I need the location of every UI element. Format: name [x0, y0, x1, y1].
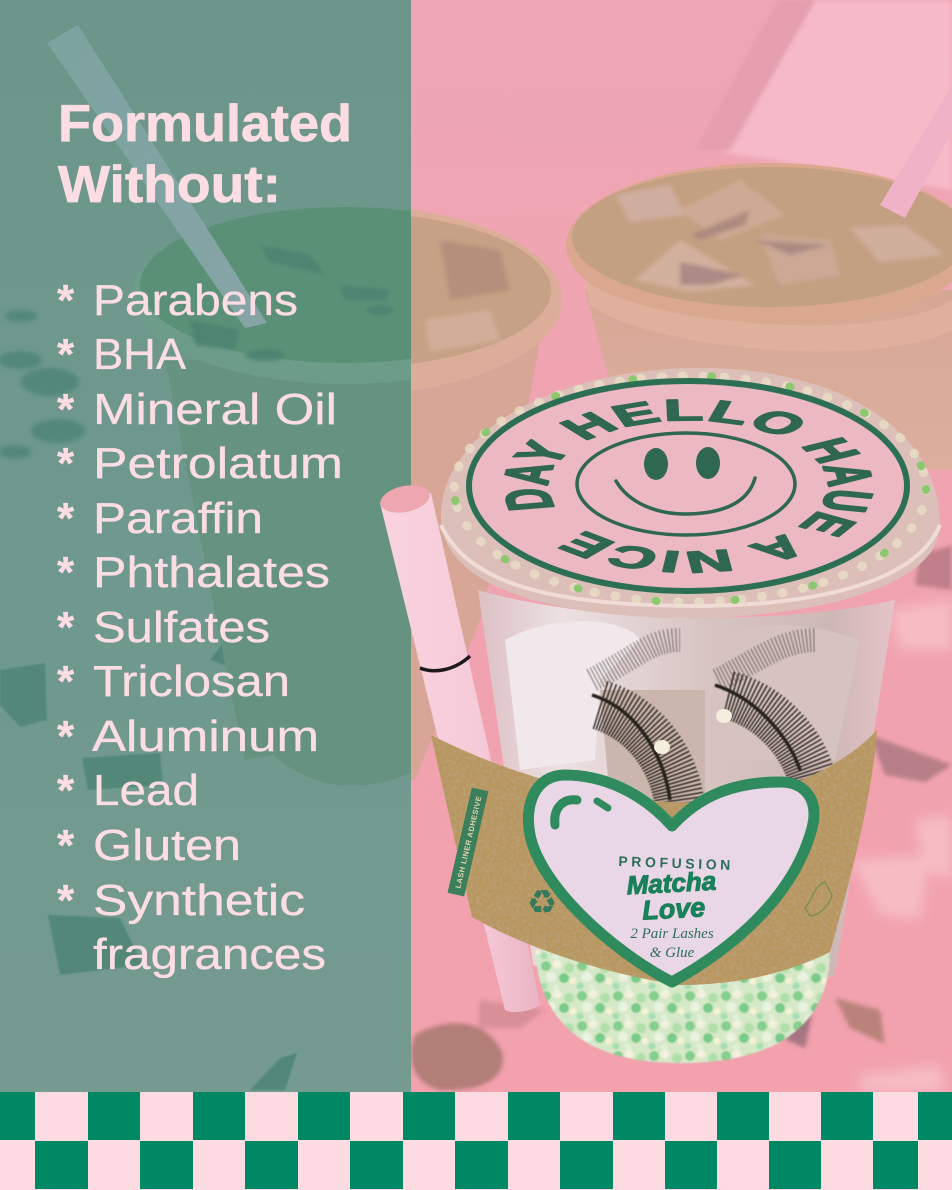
pen end cap [378, 481, 432, 517]
light wall patch [722, 0, 952, 190]
lid glitter dots cream [454, 376, 926, 602]
item: lead [57, 766, 199, 815]
panel: translucent teal overlay [0, 0, 411, 1092]
item: gluten: Gluten [93, 821, 241, 870]
item: BHA: * [57, 330, 75, 379]
right cup body [585, 290, 952, 470]
item: parabens: * [57, 276, 75, 325]
item: petrolatum: Petrolatum [93, 439, 343, 488]
panel scene: drink streaks [190, 245, 394, 361]
item: lead: * [57, 766, 75, 815]
smiley ring [577, 433, 795, 535]
item: sulfates: * [57, 603, 75, 652]
item: sulfates: Sulfates [93, 603, 270, 652]
pink straw [880, 85, 952, 218]
panel scene: blurred drops [0, 310, 85, 459]
left cup body [400, 340, 540, 780]
sleeve side tag: LASH LINER ADHESIVE [453, 795, 484, 889]
product: clear cup with lashes [478, 590, 895, 1063]
item: synthetic fragrances: fragrances [93, 930, 326, 979]
right iced drink cup [566, 163, 952, 470]
item: paraffin: Paraffin [93, 494, 263, 543]
matcha love logo [626, 866, 718, 926]
product: kraft sleeve [431, 730, 877, 985]
panel scene: green cup body [165, 360, 411, 786]
sleeve shape [431, 730, 877, 985]
right cup lid rim band [585, 280, 952, 352]
item: paraffin: * [57, 494, 75, 543]
brand name: PROFUSION [618, 853, 734, 873]
item: synthetic fragrances [57, 876, 326, 979]
left cup lid rim [128, 205, 562, 395]
circular lid text: DAY HELLO HAUE A NICE [504, 399, 874, 574]
left iced cup, right of panel [128, 205, 562, 780]
smiley mouth [616, 478, 755, 514]
right cup ice cubes [615, 180, 945, 292]
sleeve side tag [448, 787, 488, 897]
item: gluten: * [57, 821, 75, 870]
pen barrel [380, 493, 540, 1012]
heart shine small [597, 801, 608, 808]
item: petrolatum: * [57, 439, 75, 488]
panel scene: green cup lid rim [200, 360, 411, 384]
cup inner tray [505, 621, 848, 802]
item: synthetic fragrances: Synthetic [93, 876, 305, 925]
love word: Love [641, 892, 706, 926]
item: mineral oil: * [57, 385, 75, 434]
right cup drink top [572, 167, 952, 307]
matcha word: Matcha [626, 866, 717, 900]
lid rim highlight [441, 525, 940, 606]
lid glitter dots green [454, 376, 926, 602]
item: lead: Lead [93, 766, 199, 815]
heading [58, 95, 352, 214]
pale confetti reflections on table [850, 600, 952, 1092]
left cup ice [425, 240, 510, 352]
item: triclosan: * [57, 657, 75, 706]
hand icon [805, 882, 832, 916]
smiley left eye [644, 448, 668, 480]
left lash [592, 640, 680, 815]
item: mineral oil: Mineral Oil [93, 385, 337, 434]
item: BHA: BHA [93, 330, 187, 379]
pen black ring [420, 656, 470, 671]
wall shadows and table shards [411, 0, 952, 1090]
lid label [469, 381, 907, 591]
glitter in cup base [535, 950, 830, 1063]
clear cup body [478, 590, 895, 996]
panel scene: shards [0, 640, 297, 1090]
item: triclosan: Triclosan [93, 657, 290, 706]
item: aluminum: Aluminum [92, 712, 319, 761]
item: phthalates: Phthalates [93, 548, 330, 597]
panel scene: straw [47, 25, 267, 328]
script line one: 2 Pair Lashes [630, 926, 714, 942]
right cup lid rim [566, 163, 952, 327]
smiley right eye [696, 447, 720, 479]
product: cup lid [439, 368, 942, 618]
item: aluminum: * [57, 712, 75, 761]
recycle icon: ♻ [527, 883, 557, 923]
heading: Without: [58, 156, 281, 214]
lid outer rim [441, 368, 940, 618]
product: heart label [528, 775, 814, 982]
heart shine large [555, 800, 577, 825]
heading: Formulated [58, 95, 352, 153]
checkerboard footer [0, 1092, 952, 1190]
ingredients list [57, 276, 343, 979]
item: synthetic fragrances: * [57, 876, 75, 925]
item: BHA [57, 330, 187, 379]
left cup drink top [139, 212, 551, 368]
heart shape [528, 775, 814, 982]
product: lash liner pen [378, 481, 540, 1012]
panel scene: green cup drink [140, 207, 411, 363]
heart glitter pieces on lashes [654, 709, 732, 754]
item: parabens: Parabens [93, 276, 298, 325]
right lash [715, 640, 815, 780]
item: phthalates: * [57, 548, 75, 597]
script line two: & Glue [650, 945, 695, 961]
